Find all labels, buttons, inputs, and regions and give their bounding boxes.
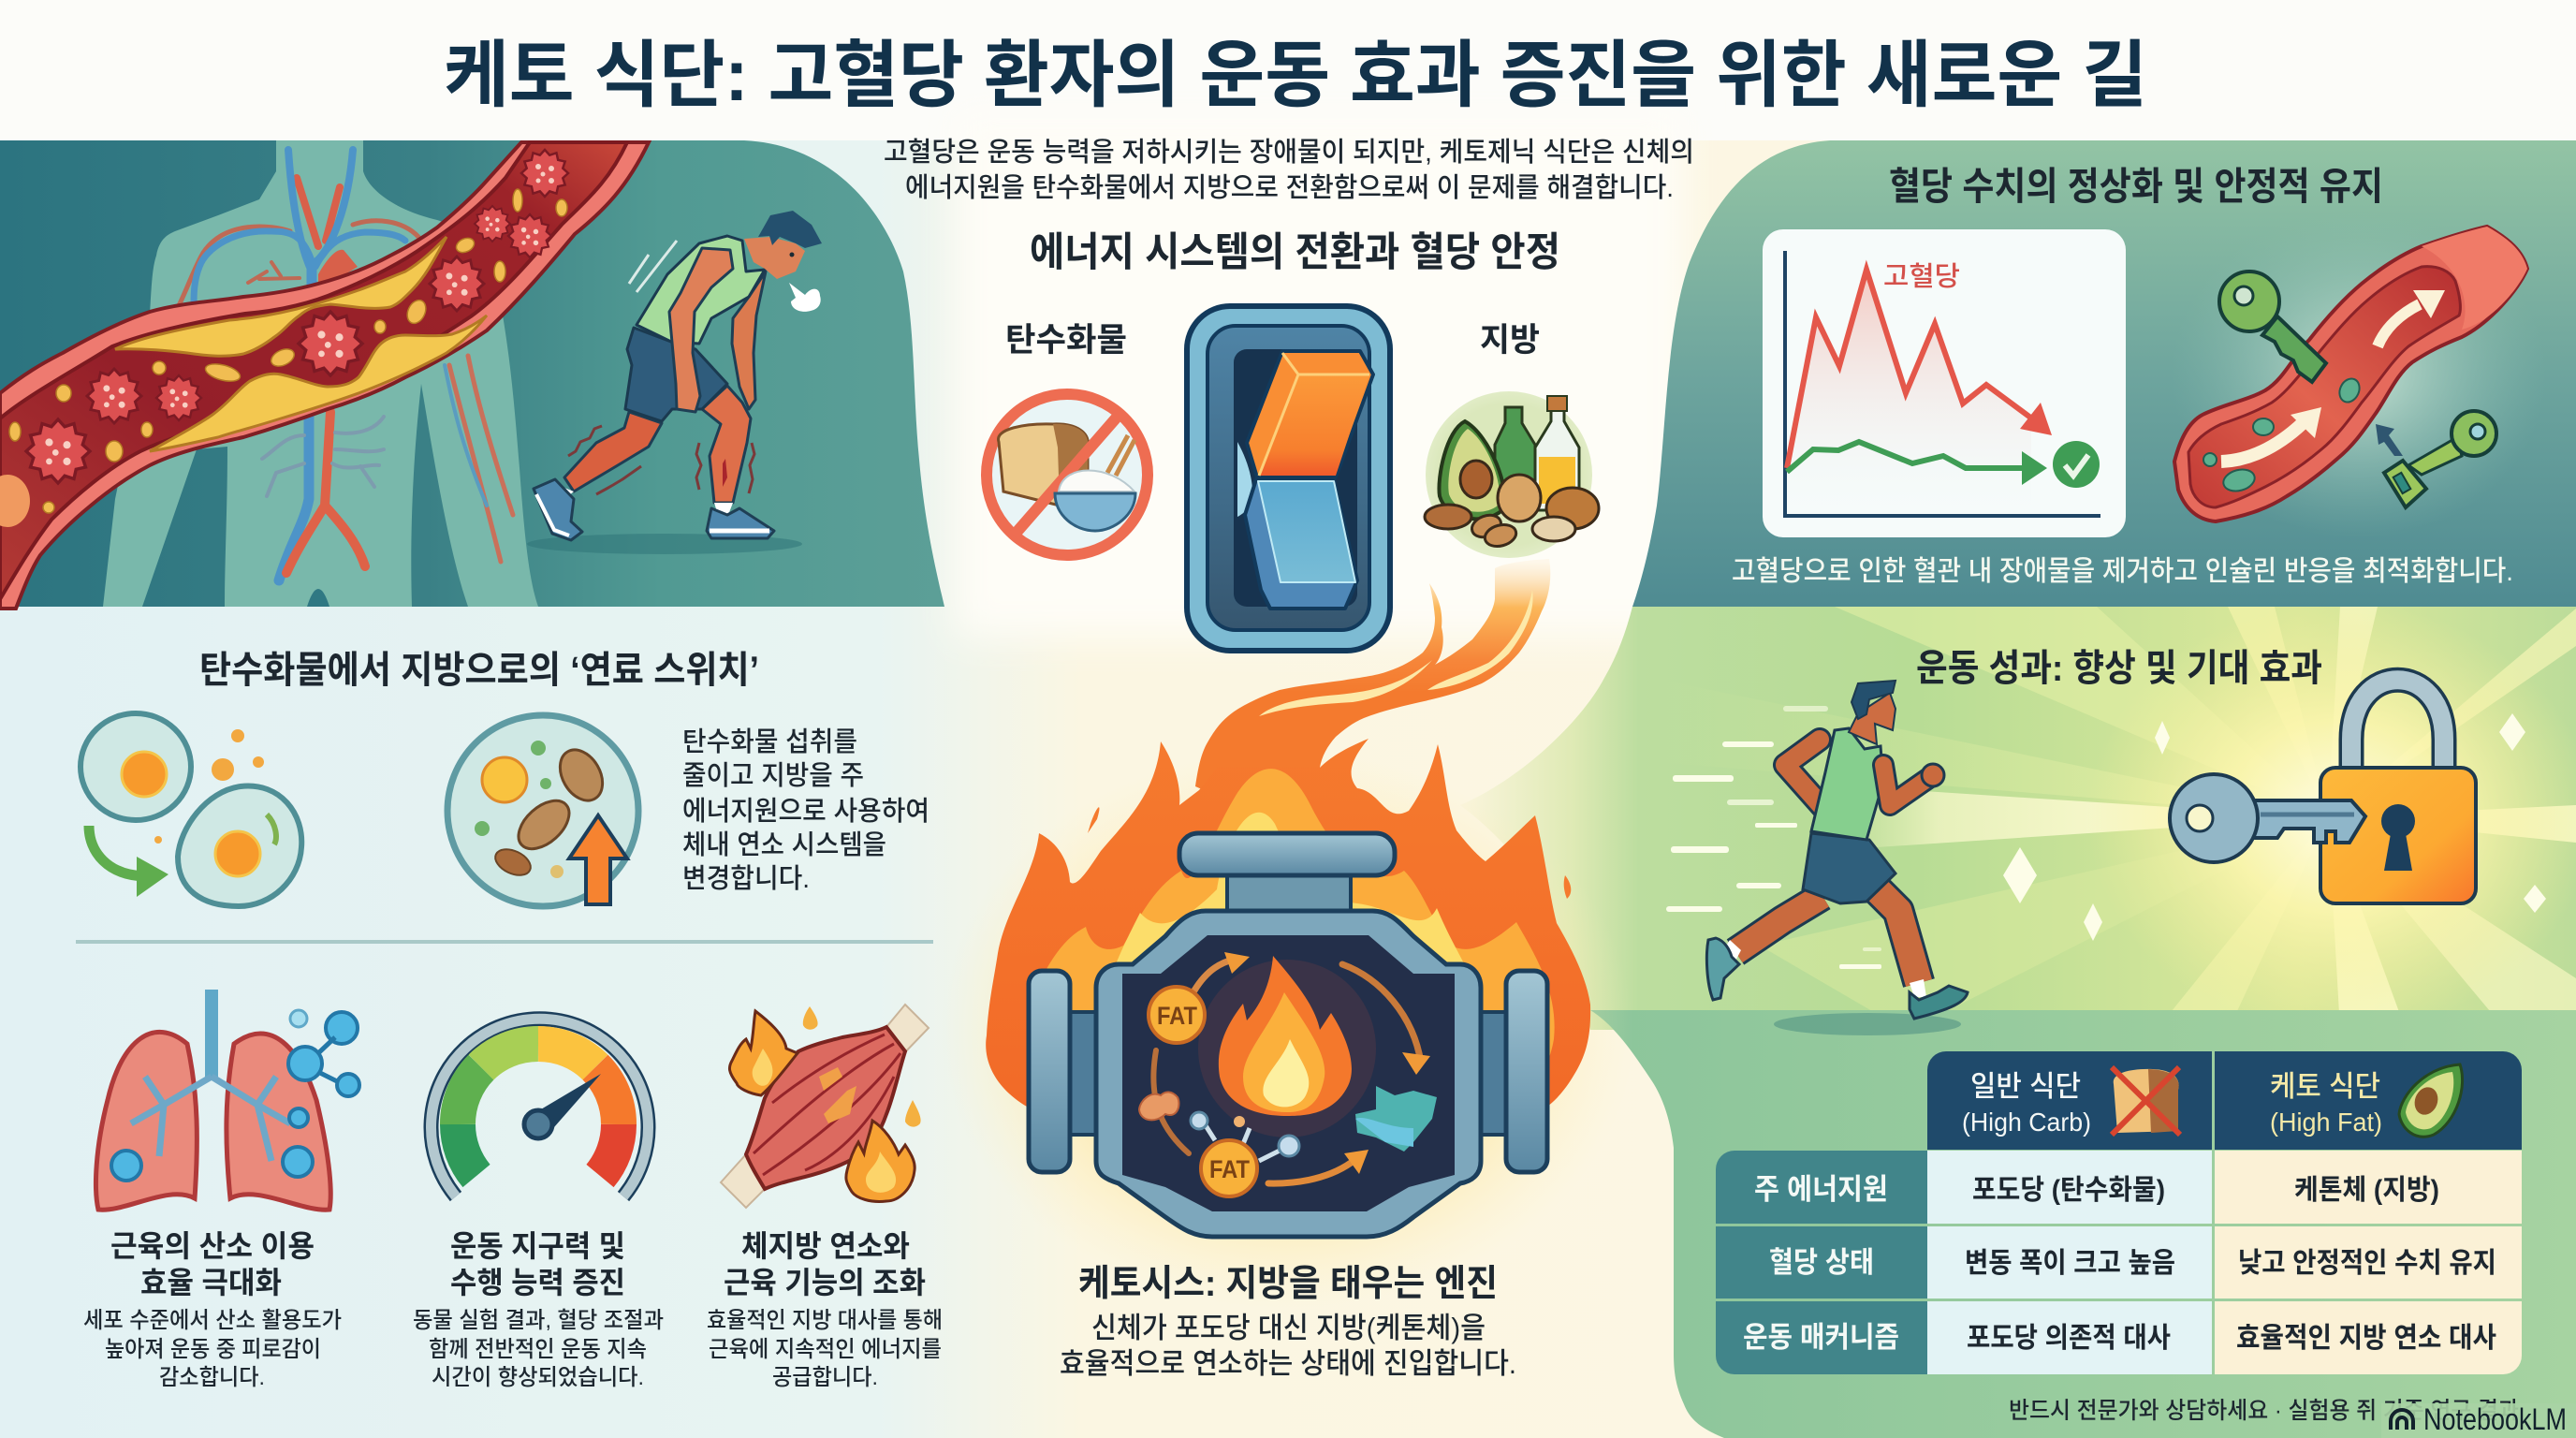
table row: glucose state: 혈당 상태 — [1769, 1246, 1874, 1279]
table row: energy source — [1716, 1151, 2522, 1224]
heading: energy system: 에너지 시스템의 전환과 혈당 안정 — [1030, 230, 1560, 275]
icon: runner — [1706, 681, 1968, 1035]
fat token upper: FAT — [1157, 1002, 1197, 1030]
fat token lower — [1191, 1112, 1299, 1196]
comparison table — [1716, 1051, 2522, 1374]
icon: avocado — [2399, 1064, 2463, 1137]
panel: fuel switch — [76, 650, 943, 1390]
benefit text: 시간이 향상되었습니다. — [432, 1365, 644, 1390]
benefit text: 근육에 지속적인 에너지를 — [709, 1337, 942, 1362]
benefit heading — [110, 1229, 315, 1299]
intro paragraph: 고혈당은 운동 능력을 저하시키는 장애물이 되지만, 케토제닉 식단은 신체의 — [884, 137, 1694, 168]
table row: exercise mechanism: 운동 매커니즘 — [1743, 1321, 1899, 1354]
table row: glucose state: 낮고 안정적인 수치 유지 — [2238, 1248, 2496, 1279]
intro paragraph — [884, 137, 1694, 203]
icon: artery with plaque — [0, 142, 649, 609]
label: fat: 지방 — [1480, 322, 1540, 359]
green key lower — [2376, 411, 2496, 507]
fat token lower: FAT — [1209, 1155, 1250, 1183]
title: 케토 식단: 고혈당 환자의 운동 효과 증진을 위한 새로운 길 — [444, 34, 2147, 116]
table row: exercise mechanism: 포도당 의존적 대사 — [1967, 1323, 2171, 1354]
heading: fuel switch: 탄수화물에서 지방으로의 ‘연료 스위치’ — [199, 650, 759, 691]
icon: lungs — [95, 990, 359, 1210]
icon: padlock and key — [2170, 680, 2476, 903]
table row: energy source: 주 에너지원 — [1754, 1173, 1888, 1206]
chart: blood glucose — [1763, 229, 2126, 537]
table header: keto diet: (High Fat) — [2270, 1108, 2382, 1137]
sparkles — [2003, 713, 2546, 941]
human body silhouette with arteries — [103, 140, 538, 607]
chart label: 고혈당 — [1883, 261, 1960, 292]
orange rocker — [1247, 351, 1373, 477]
fat token upper — [1149, 987, 1205, 1043]
blue rocker — [1237, 442, 1357, 609]
icon: crossed bread — [2112, 1067, 2180, 1135]
label: carbohydrates: 탄수화물 — [1005, 322, 1127, 359]
benefit heading: 운동 지구력 및 — [450, 1229, 625, 1263]
inner flame — [1219, 956, 1352, 1116]
benefit text: 함께 전반적인 운동 지속 — [429, 1337, 647, 1362]
benefit text: 높아져 운동 중 피로감이 — [105, 1337, 321, 1362]
speed lines — [1666, 706, 1881, 969]
table row: energy source: 케톤체 (지방) — [2294, 1175, 2439, 1206]
lower table background — [1590, 1010, 2576, 1438]
cycle arrows — [1153, 959, 1421, 1183]
benefit: muscle oxygen — [83, 990, 359, 1390]
benefit heading: 효율 극대화 — [140, 1266, 282, 1299]
caption: glucose normalization: 고혈당으로 인한 혈관 내 장애물을 제거하고 인슐린 반응을 최적화합니다. — [1732, 556, 2513, 587]
text: fuel switch description: 줄이고 지방을 주 — [682, 760, 864, 791]
heading: ketosis: 케토시스: 지방을 태우는 엔진 — [1078, 1264, 1498, 1304]
benefit heading: 체지방 연소와 — [741, 1229, 910, 1263]
ketosis description: 효율적으로 연소하는 상태에 진입합니다. — [1060, 1347, 1516, 1380]
benefit heading: 근육의 산소 이용 — [110, 1229, 315, 1263]
ketosis description — [1060, 1312, 1516, 1380]
panel: exercise performance — [1460, 602, 2576, 1438]
table row: exercise mechanism — [1716, 1301, 2522, 1374]
icon: ketosis engine — [1029, 833, 1547, 1237]
intro paragraph: 에너지원을 탄수화물에서 지방으로 전환함으로써 이 문제를 해결합니다. — [905, 172, 1674, 203]
table header: normal diet: (High Carb) — [1962, 1108, 2091, 1137]
table row: glucose state: 변동 폭이 크고 높음 — [1965, 1248, 2175, 1279]
sunburst rays — [1767, 607, 2576, 1010]
table row: energy source: 포도당 (탄수화물) — [1972, 1175, 2165, 1206]
flame glow — [941, 749, 1633, 1311]
icon: mitochondria cell — [447, 715, 638, 906]
icon: flames and ribbon — [986, 559, 1590, 1107]
icon: fat foods — [1425, 391, 1599, 558]
engine body — [1096, 911, 1481, 1237]
table header: keto diet: 케토 식단 — [2270, 1070, 2380, 1103]
text: fuel switch description: 에너지원으로 사용하여 — [682, 796, 929, 827]
benefit text — [413, 1308, 664, 1390]
engine flanges and pipes — [1070, 1012, 1098, 1135]
benefit text — [707, 1308, 943, 1390]
panel: hyperglycemia obstacle — [0, 140, 944, 609]
ketosis description: 신체가 포도당 대신 지방(케톤체)을 — [1091, 1312, 1486, 1344]
icon: fuel switch — [1187, 306, 1390, 651]
icon: fatigued runner — [527, 211, 822, 554]
heading: glucose normalization: 혈당 수치의 정상화 및 안정적 유지 — [1889, 165, 2383, 208]
green key upper — [2219, 271, 2326, 382]
title band background — [0, 0, 2576, 140]
benefit text: 동물 실험 결과, 혈당 조절과 — [413, 1308, 664, 1333]
sugar cells — [0, 150, 568, 527]
center column background — [955, 112, 1685, 637]
text: fuel switch description: 변경합니다. — [682, 863, 810, 894]
benefit text: 효율적인 지방 대사를 통해 — [707, 1308, 943, 1333]
icon: gauge — [432, 1019, 649, 1196]
benefit: fat burning — [707, 1005, 943, 1390]
benefit heading — [724, 1229, 926, 1299]
icon: key — [2170, 774, 2365, 862]
main flames — [986, 739, 1590, 1107]
panel: blood glucose normalization — [1632, 140, 2576, 607]
table header: keto diet — [2215, 1051, 2522, 1150]
benefit text: 감소합니다. — [159, 1365, 265, 1390]
benefit text: 세포 수준에서 산소 활용도가 — [83, 1308, 342, 1333]
icon: cells — [80, 713, 301, 906]
table row: glucose state — [1716, 1226, 2522, 1299]
heading: exercise performance: 운동 성과: 향상 및 기대 효과 — [1916, 648, 2322, 689]
table header: normal diet — [1927, 1051, 2212, 1150]
benefit heading — [450, 1229, 625, 1299]
table row: exercise mechanism: 효율적인 지방 연소 대사 — [2236, 1323, 2496, 1354]
table header: normal diet: 일반 식단 — [1970, 1070, 2081, 1103]
benefit text: 공급합니다. — [772, 1365, 878, 1390]
text: fuel switch description: 탄수화물 섭취를 — [682, 726, 857, 757]
ketone body blob — [1355, 1086, 1437, 1152]
icon: muscle with flames — [721, 1005, 929, 1208]
benefit: endurance — [413, 1019, 664, 1390]
benefit text — [83, 1308, 342, 1390]
text: fuel switch description — [682, 726, 929, 894]
fuel ribbon from fat to flame — [1195, 559, 1550, 796]
benefit heading: 수행 능력 증진 — [450, 1266, 625, 1299]
icon: no carbs — [987, 394, 1148, 555]
benefit heading: 근육 기능의 조화 — [724, 1266, 926, 1299]
footer note: 반드시 전문가와 상담하세요 · 실험용 쥐 기준 연구 결과 — [2009, 1398, 2519, 1424]
text: fuel switch description: 체내 연소 시스템을 — [682, 829, 886, 860]
icon: healed vessel with keys — [2172, 211, 2546, 538]
